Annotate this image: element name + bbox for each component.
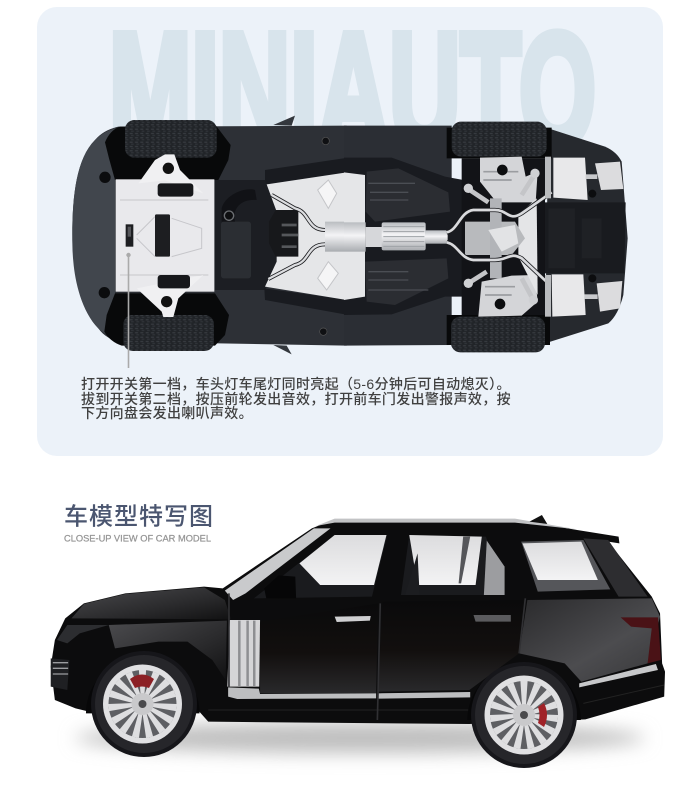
heading: 车模型特写图 bbox=[64, 504, 214, 530]
ground shadow bbox=[75, 723, 645, 753]
description text: 拔到开关第二档，按压前轮发出音效，打开前车门发出警报声效，按 bbox=[81, 391, 511, 407]
panel: underside view bbox=[37, 0, 663, 456]
fender vent bbox=[227, 620, 260, 687]
exhaust system bbox=[344, 192, 552, 285]
windows bbox=[254, 535, 648, 598]
heading bbox=[64, 504, 214, 544]
floor panels bbox=[365, 168, 450, 305]
rear silencers bbox=[545, 157, 623, 317]
description text bbox=[81, 376, 511, 421]
floor pan bbox=[265, 172, 347, 300]
description text: 下方向盘会发出喇叭声效。 bbox=[81, 405, 253, 421]
tail light bbox=[621, 617, 661, 663]
front wheel bbox=[91, 651, 197, 757]
rear tyres bbox=[451, 122, 547, 352]
radiator box bbox=[221, 189, 257, 278]
door handles bbox=[335, 615, 511, 622]
pointer line bbox=[126, 253, 131, 368]
rear suspension bbox=[464, 157, 540, 317]
underside: rear half bbox=[344, 122, 628, 352]
subheading: CLOSE-UP VIEW OF CAR MODEL bbox=[64, 534, 212, 544]
car underside bbox=[72, 116, 628, 354]
exhaust front pipes bbox=[268, 195, 325, 279]
description text: 打开开关第一档，车头灯车尾灯同时亮起（5-6分钟后可自动熄灭）。 bbox=[81, 376, 511, 392]
wing mirror bbox=[264, 575, 296, 598]
rear wheel bbox=[471, 662, 577, 768]
side view car bbox=[51, 515, 665, 768]
front tyres bbox=[123, 120, 217, 351]
headlight and grille bbox=[51, 625, 109, 690]
antenna bbox=[529, 515, 547, 524]
underside: front half bbox=[72, 116, 348, 354]
chrome strips bbox=[208, 593, 664, 720]
engine block bbox=[269, 210, 298, 257]
car body bbox=[51, 515, 665, 724]
wheel arches bbox=[86, 657, 581, 720]
front plate bbox=[116, 154, 214, 317]
